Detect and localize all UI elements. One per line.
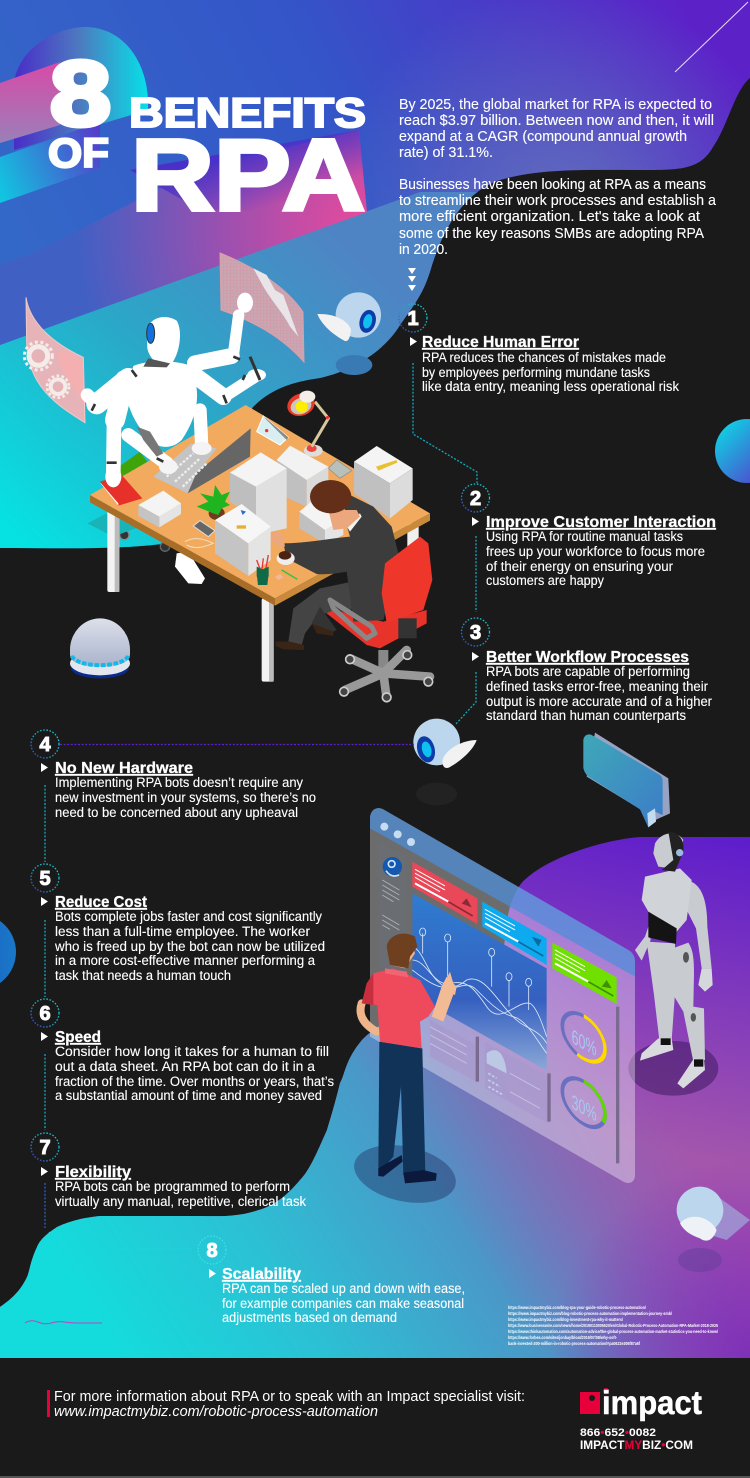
number badge 3: 3 [470, 622, 481, 644]
desk legs [107, 507, 419, 682]
body: RPA bots are capable of performing [486, 664, 690, 679]
body [486, 664, 712, 723]
body: RPA can be scaled up and down with ease, [222, 1281, 465, 1296]
number badge 7 [31, 1133, 59, 1161]
donut 60 percent: 60% [572, 1024, 596, 1061]
footer call to action [54, 1388, 525, 1420]
speech bubble [583, 733, 670, 827]
body: in a more cost-effective manner performing a [55, 953, 315, 968]
camera bot middle [413, 719, 477, 805]
office worker [272, 480, 433, 702]
panel sidebar [378, 842, 407, 977]
body [55, 1179, 306, 1209]
body: out a data sheet. An RPA bot can do it in a [55, 1059, 315, 1074]
red notebook [100, 475, 142, 506]
man legs [276, 580, 360, 650]
impact logo: impact [602, 1384, 702, 1421]
worker torso [283, 495, 398, 622]
number badge 1: 1 [407, 308, 419, 330]
heading: No New Hardware [55, 760, 193, 777]
number badge 3 [462, 618, 490, 646]
heading: Speed [55, 1029, 101, 1046]
calculator [328, 460, 352, 478]
body: who is freed up by the bot can now be utilized [54, 939, 325, 954]
earphones [185, 539, 213, 548]
blue card [482, 902, 547, 965]
intro text: to streamline their work processes and establish a [399, 193, 717, 209]
body [54, 909, 325, 983]
body: new investment in your systems, so there’s no [55, 790, 316, 805]
bottom gradient panel [0, 837, 750, 1358]
worker head [328, 510, 360, 530]
robot arms [87, 315, 255, 472]
heading: Flexibility [55, 1164, 131, 1181]
robot head [653, 833, 683, 868]
intro text: some of the key reasons SMBs are adopting RPA [399, 226, 704, 242]
item 2 [462, 484, 716, 588]
source citations: bank-invested-300-million-in-robotic-process-automation/#pa0622e305f87a6f [508, 1341, 640, 1346]
man shirt [362, 968, 435, 1048]
line chart [412, 893, 547, 1071]
footer accent bar [47, 1390, 50, 1417]
body: a substantial amount of time and money saved [55, 1088, 322, 1103]
man arms [360, 1003, 377, 1032]
body: output is more accurate and of a higher [486, 694, 712, 709]
number badge 8 [198, 1236, 226, 1264]
calendar [257, 416, 288, 445]
item 8 [198, 1236, 465, 1325]
source citations: https://www.impactmybiz.com/blog-rpa-your-guide-robotic-process-automation/ [508, 1305, 647, 1310]
floor orb robot [70, 618, 130, 678]
intro text: in 2020. [399, 242, 448, 258]
body: like data entry, meaning less operational risk [422, 379, 679, 394]
desk lamp [284, 390, 329, 457]
body: less than a full-time employee. The worker [55, 924, 310, 939]
intro text: more efficient organization. Let's take a look at [399, 209, 700, 225]
item 6 [31, 999, 334, 1103]
number badge 6: 6 [39, 1003, 51, 1025]
body: Using RPA for routine manual tasks [486, 529, 683, 544]
body: RPA reduces the chances of mistakes made [422, 350, 666, 365]
down arrows [408, 268, 416, 291]
robot arms [685, 880, 712, 968]
body [55, 1044, 334, 1103]
body: defined tasks error-free, meaning their [486, 679, 708, 694]
top gradient panel [0, 0, 750, 560]
man at dashboard [360, 934, 457, 1183]
illustration: office desk scene [24, 253, 433, 702]
number badge 5 [31, 864, 59, 892]
green card [552, 943, 617, 1004]
donut 60 percent [562, 1004, 605, 1070]
man head [390, 950, 415, 968]
heading: Scalability [222, 1266, 301, 1283]
robot legs [647, 942, 705, 1062]
body: virtually any manual, repetitive, clerical task [55, 1194, 306, 1209]
plant [197, 485, 230, 520]
lower text blocks [430, 1007, 618, 1163]
heading: Reduce Human Error [422, 334, 579, 351]
office chair [327, 610, 433, 702]
paper stacks [230, 446, 413, 544]
intro text: reach $3.97 billion. Between now and then, it will [399, 113, 714, 129]
item 7 [31, 1133, 306, 1209]
body: adjustments based on demand [222, 1310, 397, 1325]
title word of: OF [48, 130, 109, 176]
title word rpa: RPA [131, 120, 365, 232]
man shadow [349, 1137, 461, 1211]
hologram: chart [220, 253, 304, 362]
number badge 1 [399, 304, 427, 332]
side decorative circles [0, 419, 750, 990]
body [222, 1281, 465, 1325]
front paper stack [215, 504, 271, 576]
coffee and desk items [257, 551, 297, 585]
body: standard than human counterparts [486, 708, 686, 723]
intro text: By 2025, the global market for RPA is expected to [399, 97, 712, 113]
source citations: https://www.impactmybiz.com/blog-robotic-process-automation-implementation-journey-smb/ [508, 1311, 673, 1316]
item 4 [31, 730, 316, 820]
heading: Improve Customer Interaction [486, 514, 716, 531]
body: need to be concerned about any upheaval [55, 805, 298, 820]
donut 30 percent [562, 1070, 605, 1136]
number badge 7: 7 [39, 1137, 51, 1159]
body: frees up your workforce to focus more [486, 544, 705, 559]
robot torso [642, 868, 692, 932]
phone [193, 521, 215, 537]
body: of their energy on ensuring your [486, 559, 673, 574]
title word benefits: BENEFITS [129, 89, 366, 136]
connector lines [45, 363, 477, 1249]
desk top [90, 405, 430, 606]
footer [0, 1358, 750, 1478]
body [422, 350, 679, 394]
item 3 [462, 618, 712, 723]
decorative wave [25, 1321, 102, 1324]
body: for example companies can make seasonal [222, 1296, 464, 1311]
number badge 6 [31, 999, 59, 1027]
footer call to action: www.impactmybiz.com/robotic-process-automation [54, 1403, 378, 1420]
phone number: 866•652•0082 [580, 1427, 656, 1439]
body: customers are happy [486, 573, 604, 588]
number badge 4: 4 [39, 734, 51, 756]
body: fraction of the time. Over months or years, that’s [55, 1074, 334, 1089]
title [48, 43, 366, 232]
source citations: https://www.forbes.com/sites/jonbay/bloat/2019/07/08/why-soft- [508, 1335, 617, 1340]
illustration: dashboard scene [349, 719, 750, 1272]
body: RPA bots can be programmed to perform [55, 1179, 290, 1194]
robot [87, 293, 266, 487]
donut 30 percent: 30% [572, 1090, 596, 1126]
robot torso [126, 361, 197, 447]
source citations: https://www.impactmybiz.com/blog-investment-rpa-why-it-matters/ [508, 1317, 624, 1322]
number badge 4 [31, 730, 59, 758]
number badge 8: 8 [206, 1240, 218, 1262]
body: task that needs a human touch [55, 968, 231, 983]
laptop [153, 428, 251, 493]
number badge 5: 5 [39, 868, 51, 890]
intro text [399, 97, 717, 258]
body: Bots complete jobs faster and cost significantly [55, 909, 322, 924]
title numeral 8: 8 [50, 43, 111, 145]
humanoid robot [635, 832, 713, 1088]
source citations [508, 1305, 719, 1346]
dashboard panel [370, 808, 635, 1183]
man trousers [378, 1042, 425, 1175]
chair back [382, 537, 432, 623]
camera bot bottom [677, 1187, 750, 1272]
hologram: gears [24, 297, 85, 423]
intro text: expand at a CAGR (compound annual growth [399, 129, 687, 145]
robot shadow [628, 1041, 718, 1096]
footer call to action: For more information about RPA or to speak with an Impact specialist visit: [54, 1388, 525, 1405]
red card [412, 862, 477, 924]
intro text: Businesses have been looking at RPA as a means [399, 177, 706, 193]
body: Implementing RPA bots doesn’t require any [55, 775, 303, 790]
small paper box [138, 491, 181, 527]
body: by employees performing mundane tasks [422, 365, 650, 380]
robot chair behind desk [87, 452, 205, 584]
body [486, 529, 705, 588]
camera bot top [317, 292, 381, 375]
item 5 [31, 864, 325, 983]
heading: Reduce Cost [55, 894, 148, 911]
intro text: rate) of 31.1%. [399, 145, 493, 161]
body [55, 775, 316, 820]
heading: Better Workflow Processes [486, 649, 689, 666]
panel header [370, 808, 635, 977]
robot head [147, 317, 180, 366]
body: Consider how long it takes for a human to fill [55, 1044, 329, 1059]
number badge 2 [462, 484, 490, 512]
item 1 [399, 304, 679, 394]
number badge 2: 2 [470, 488, 481, 510]
website: IMPACTMYBIZ•COM [580, 1440, 693, 1452]
